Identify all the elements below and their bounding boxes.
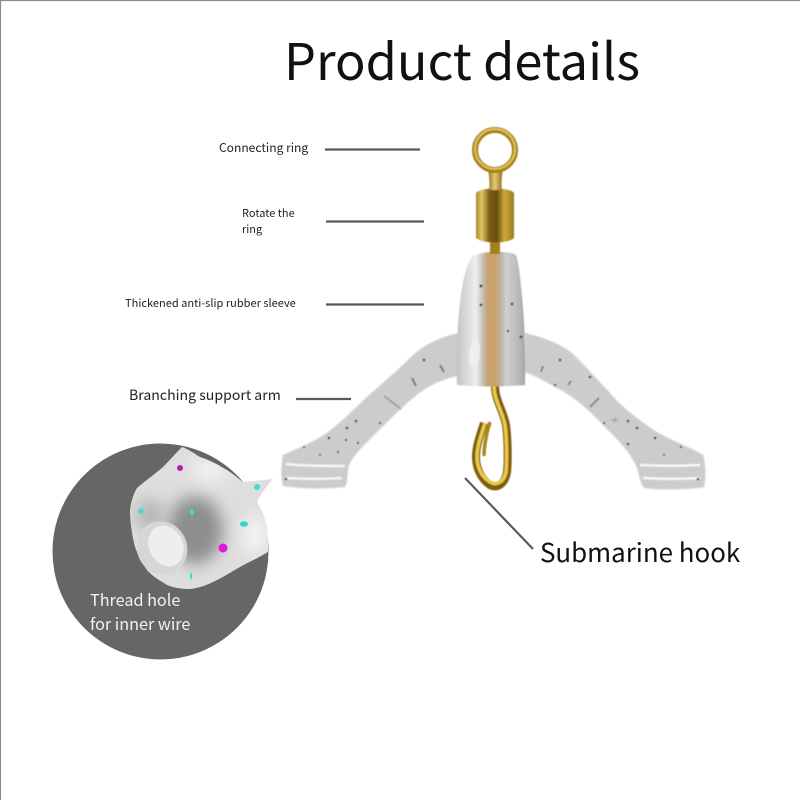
label: rotate the ring: ring bbox=[242, 221, 263, 237]
label: connecting ring: Connecting ring bbox=[219, 139, 308, 156]
title: Product details bbox=[284, 21, 640, 95]
hook pointer line bbox=[465, 478, 533, 549]
callout: thread hole detail bbox=[52, 440, 280, 660]
left support arm bbox=[282, 333, 458, 488]
connecting ring eye bbox=[475, 129, 515, 190]
label: rotate the ring bbox=[242, 205, 424, 237]
label: branching support arm: Branching support arm bbox=[129, 385, 281, 405]
callout circle bbox=[52, 444, 268, 660]
thread hole bbox=[128, 513, 196, 583]
right support arm bbox=[525, 333, 705, 489]
enlarged arm end bbox=[130, 447, 273, 589]
callout caption: Thread hole bbox=[90, 587, 180, 611]
callout caption bbox=[90, 587, 190, 635]
swivel barrel (rotate the ring) bbox=[476, 188, 514, 242]
label: rotate the ring: Rotate the bbox=[242, 205, 295, 221]
product: rig assembly bbox=[282, 129, 705, 489]
label: submarine hook: Submarine hook bbox=[540, 533, 741, 570]
swivel shaft bbox=[490, 241, 500, 254]
hook bbox=[476, 386, 508, 486]
callout caption: for inner wire bbox=[90, 611, 190, 635]
glitter dots bbox=[138, 465, 260, 579]
label: rubber sleeve: Thickened anti-slip rubber sleeve bbox=[125, 295, 296, 311]
rubber sleeve bbox=[457, 252, 525, 386]
